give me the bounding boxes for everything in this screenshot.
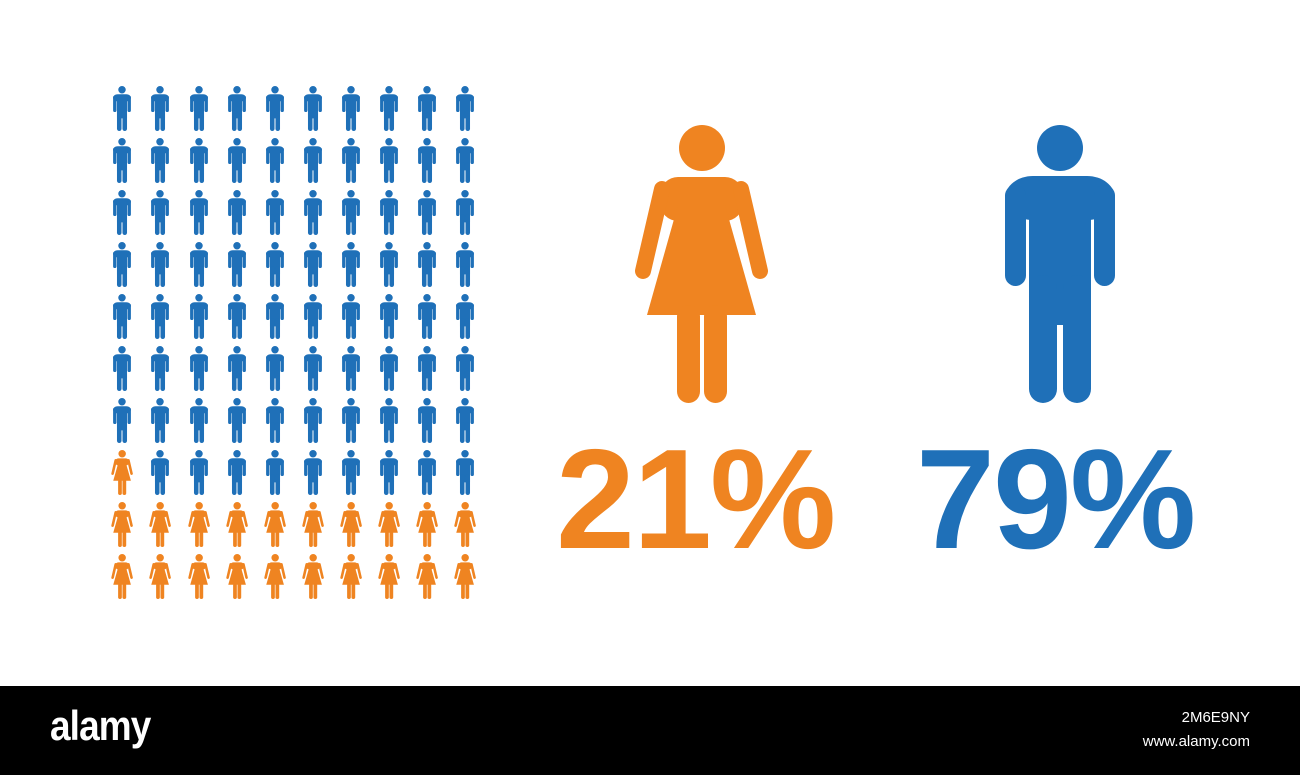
icon: big man bbox=[1005, 125, 1115, 403]
orange women bbox=[113, 450, 475, 599]
icon grid bbox=[111, 86, 476, 599]
footer bbox=[0, 686, 1300, 775]
percentage: women: 21% bbox=[556, 420, 834, 579]
footer logo: alamy bbox=[50, 702, 150, 749]
footer image id bbox=[1142, 709, 1250, 750]
footer image id: www.alamy.com bbox=[1143, 733, 1250, 750]
footer image id: 2M6E9NY bbox=[1182, 709, 1250, 726]
percentage: men: 79% bbox=[916, 420, 1194, 579]
icon: big woman bbox=[635, 125, 768, 403]
blue men bbox=[113, 86, 474, 495]
